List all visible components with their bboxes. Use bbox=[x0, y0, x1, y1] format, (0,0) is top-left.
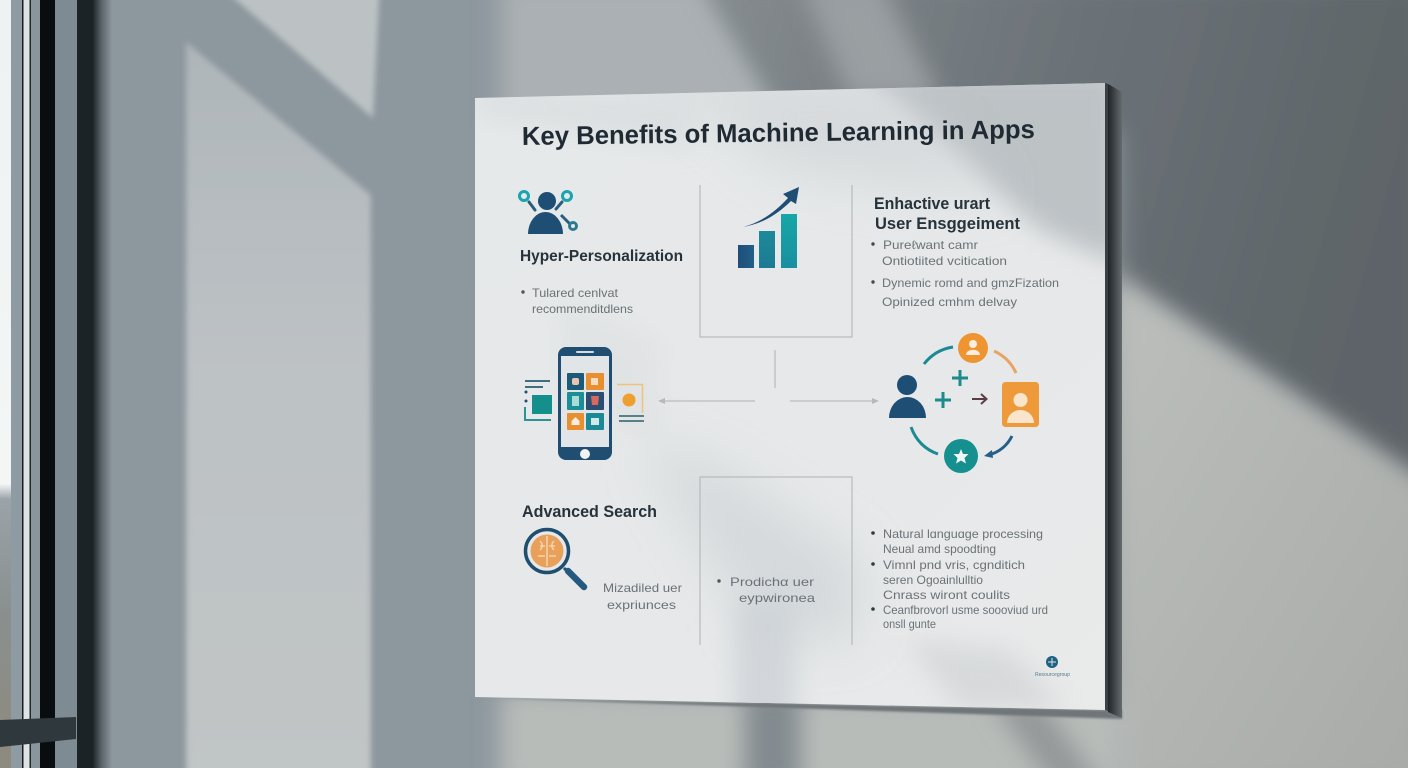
heading: Hyper-Personalization bbox=[520, 248, 683, 265]
text bbox=[603, 581, 682, 612]
teal star circle bbox=[944, 439, 978, 473]
icon: person with nodes bbox=[520, 192, 576, 234]
centre divider bbox=[774, 350, 776, 388]
text: natural language bullets: Neual amd spoodting bbox=[883, 542, 996, 556]
arrow: right bbox=[790, 398, 879, 404]
frame lines: top centre panel bbox=[700, 185, 852, 337]
icon: phone with app tiles bbox=[558, 347, 612, 460]
text: centre bullet: eypwironea bbox=[739, 591, 815, 605]
bullet text bbox=[871, 238, 1059, 309]
bullet text: Pureℓwant camr bbox=[883, 238, 978, 252]
text: natural language bullets bbox=[871, 527, 1048, 631]
heading: Advanced Search bbox=[522, 503, 657, 521]
text: natural language bullets: Cnrass wiront coulits bbox=[883, 588, 1010, 602]
user figure bbox=[889, 375, 926, 418]
section: advanced search bbox=[522, 503, 682, 612]
text: natural language bullets: Natural lɑnguɑge processing bbox=[883, 527, 1043, 541]
text: centre bullet bbox=[717, 575, 815, 605]
bullet text: Tulared cenlvat bbox=[532, 286, 619, 300]
icon: growth bar chart bbox=[738, 187, 799, 268]
text: expriunces bbox=[607, 598, 676, 612]
logo: Resourcegroup bbox=[1035, 672, 1070, 678]
icon: engagement cycle bbox=[889, 333, 1039, 473]
text: Mizadiled uer bbox=[603, 581, 682, 595]
title: Key Benefits of Machine Learning in Apps bbox=[522, 114, 1035, 151]
icon: magnifier with brain bbox=[526, 530, 584, 587]
orange profile card bbox=[1002, 382, 1039, 427]
cycle arcs bbox=[924, 347, 953, 364]
bullet text bbox=[521, 286, 633, 316]
orange person circle bbox=[958, 333, 988, 363]
bullet text: Dynemic romd and gmzFization bbox=[882, 276, 1059, 290]
icon: content card left bbox=[524, 381, 552, 420]
bullet text: recommenditdlens bbox=[532, 302, 633, 316]
board drop shadow bbox=[485, 84, 1122, 719]
section: enhanced user engagement bbox=[871, 195, 1059, 309]
window frame bbox=[0, 0, 112, 768]
plus signs bbox=[935, 370, 968, 408]
panel: board bbox=[475, 70, 1120, 730]
section: hyper-personalization bbox=[520, 192, 683, 316]
text: natural language bullets: Vimnl pnd vris, cgnditich bbox=[883, 558, 1025, 572]
arrow: left bbox=[658, 398, 755, 404]
frame lines: bottom centre panel bbox=[700, 477, 852, 645]
text: centre bullet: Prodichα uer bbox=[730, 575, 814, 589]
heading: Enhactive urart bbox=[874, 195, 990, 213]
text: natural language bullets: seren Ogoainlulltio bbox=[883, 573, 983, 587]
icon: content card right bbox=[617, 384, 644, 421]
text: natural language bullets: Ceanfbrovorl usme soooviud urd bbox=[883, 603, 1048, 617]
small arrow bbox=[972, 394, 986, 404]
heading bbox=[874, 195, 1021, 233]
text: natural language bullets: onsll gunte bbox=[883, 617, 936, 631]
bullet text: Opinized cmhm delvay bbox=[882, 295, 1017, 309]
heading: User Ensggeiment bbox=[875, 215, 1021, 233]
bullet text: Ontiotiited vcitication bbox=[882, 254, 1007, 268]
logo bbox=[1035, 656, 1070, 678]
